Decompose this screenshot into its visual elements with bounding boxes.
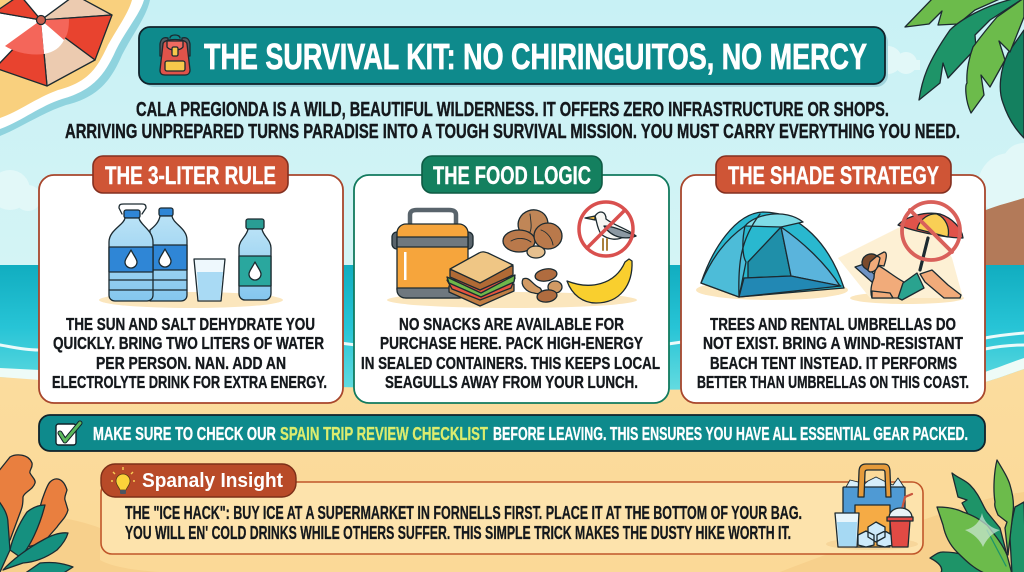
- body text: the shade strategy: [697, 314, 969, 392]
- tab heading: the food logic: THE FOOD LOGIC: [433, 162, 591, 190]
- decor: bottom left plants: [0, 455, 73, 572]
- background: sky: [0, 0, 1024, 270]
- body text: the food logic: PURCHASE HERE. PACK HIGH-ENERGY: [380, 333, 643, 353]
- umbrella canopy: [0, 0, 112, 86]
- icon: sunbather and crossed umbrella: [855, 202, 963, 300]
- banner text: [93, 423, 968, 444]
- background: foam: [0, 358, 1024, 382]
- body text: the shade strategy: NOT EXIST. BRING A WIND-RESISTANT: [703, 333, 963, 353]
- background: headland: [975, 198, 1024, 265]
- background: waves: [0, 333, 1024, 350]
- icon: light bulb: [111, 467, 135, 494]
- tab heading: the 3-liter rule: THE 3-LITER RULE: [105, 162, 276, 190]
- background: clouds: [0, 46, 1024, 217]
- intro text: [65, 99, 960, 143]
- tab heading: the shade strategy: [716, 156, 951, 193]
- tab heading: the shade strategy: THE SHADE STRATEGY: [728, 162, 939, 190]
- title bar: [139, 27, 888, 87]
- icon: cooler bag with ice and drinks: [826, 464, 918, 550]
- body text: the shade strategy: TREES AND RENTAL UMBRELLAS DO: [710, 314, 956, 334]
- icon: sparkle watermark: [965, 513, 1000, 547]
- background: sand: [0, 369, 1024, 572]
- body text: the food logic: NO SNACKS ARE AVAILABLE FOR: [399, 314, 624, 334]
- icon: lunchbox: [392, 210, 473, 298]
- banner text: MAKE SURE TO CHECK OUR: [93, 423, 276, 444]
- decor: beach umbrella on sand: [0, 0, 150, 136]
- background: sea: [0, 265, 1024, 390]
- insight box: [101, 464, 923, 554]
- body text: the 3-liter rule: QUICKLY. BRING TWO LITERS OF WATER: [53, 333, 324, 353]
- icon: sand and sun beam: [696, 225, 964, 304]
- body text: the food logic: SEAGULLS AWAY FROM YOUR LUNCH.: [385, 372, 638, 392]
- tab heading: the food logic: [422, 156, 602, 193]
- panel: the food logic: [354, 156, 669, 403]
- body text: the 3-liter rule: [52, 314, 327, 392]
- insight heading tab: Spanaly Insight: [142, 470, 283, 492]
- panel: the 3-liter rule: [39, 156, 343, 403]
- insight heading tab: [101, 464, 296, 497]
- body text: the 3-liter rule: THE SUN AND SALT DEHYDRATE YOU: [66, 314, 315, 334]
- icon: beach tent: [701, 212, 844, 297]
- banner text: SPAIN TRIP REVIEW CHECKLIST: [280, 423, 488, 444]
- icon: banana: [567, 259, 632, 303]
- background: darker sand dune: [0, 492, 1024, 572]
- checklist banner: [39, 415, 985, 451]
- panel: the shade strategy: [681, 156, 985, 403]
- icon: no seagull sign: [579, 202, 636, 256]
- insight text: [125, 502, 802, 543]
- icon: red backpack: [160, 35, 190, 75]
- decor: palm leaves top right: [905, 0, 1024, 138]
- icon: sandwich: [447, 252, 515, 306]
- tab heading: the 3-liter rule: [93, 156, 288, 193]
- icon: walnuts and almonds: [503, 206, 562, 303]
- body text: the food logic: IN SEALED CONTAINERS. THIS KEEPS LOCAL: [361, 353, 660, 373]
- icon: green check box: [56, 423, 80, 445]
- body text: the 3-liter rule: PER PERSON. NAN. ADD AN: [96, 353, 286, 373]
- decor: bottom right plants: [930, 460, 1024, 572]
- body text: the food logic: [361, 314, 660, 392]
- icon: food illustrations: [387, 202, 637, 308]
- body text: the 3-liter rule: ELECTROLYTE DRINK FOR EXTRA ENERGY.: [52, 372, 327, 392]
- icon: water bottles and glass: [99, 204, 283, 308]
